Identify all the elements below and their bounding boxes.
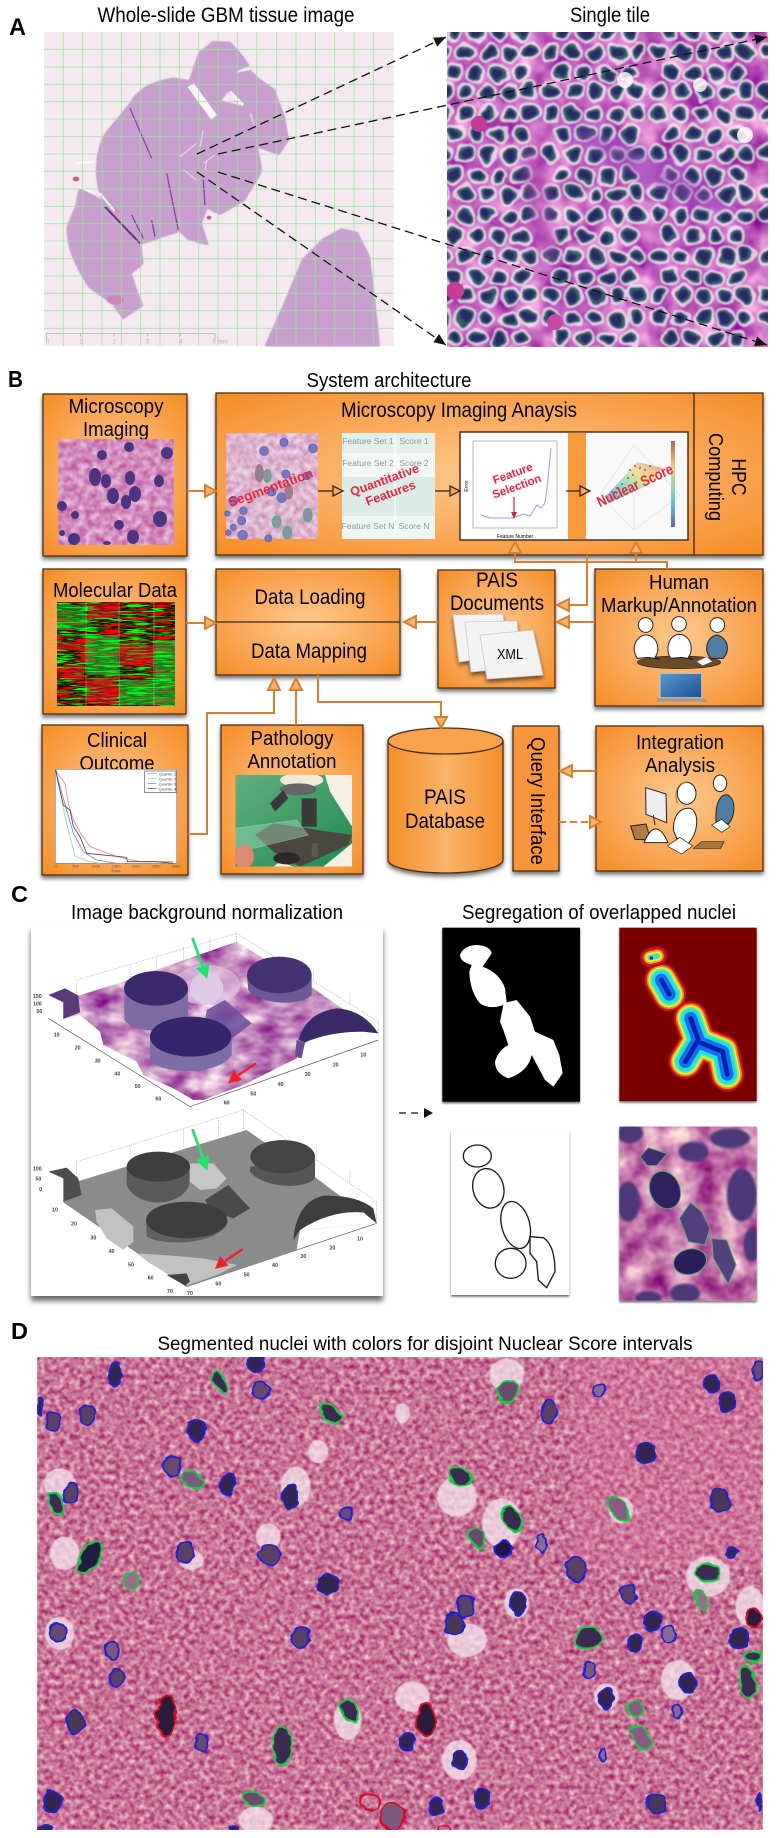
table: quantitative features: Score N [399,521,429,531]
box: Human Markup/Annotation: Human [649,571,709,594]
plot: grey surface: 60 [148,1276,154,1282]
plot: grey surface: 40 [109,1249,115,1255]
plot: colour surface: 100 [33,1001,42,1007]
arrow: pathology annotation to data mapping [290,678,302,725]
plot: colour surface: 10 [360,1052,366,1058]
scale bar: 4 [179,339,183,345]
title: segmented nuclei: Segmented nuclei with colors for disjoint Nuclear Score intervals [158,1333,693,1355]
chart: survival curves: 1000 [91,864,101,869]
panels: nuclei segregation steps [442,928,760,1304]
image: binary nuclei mask [442,928,580,1102]
dashed zoom arrows from slide to tile [197,37,767,345]
label: segmentation: Segmentation [226,465,315,510]
panel label D: D [11,1318,28,1344]
tissue: top lobe [191,43,247,120]
red outlined nuclei [156,1608,761,1834]
pink fragments [73,177,211,305]
box: Microscopy Imaging [43,394,187,556]
chart: survival curves: 3000 [172,864,181,869]
plot: colour surface: 40 [114,1071,120,1077]
title: segregation of nuclei: Segregation of overlapped nuclei [462,901,736,924]
divider and HPC computing section: Computing [704,433,727,521]
box: PAIS Documents: PAIS [476,569,518,592]
box: Human Markup/Annotation: Markup/Annotation [601,594,757,617]
chart: survival curves: 500 [72,864,80,869]
plot: colour surface: 150 [33,994,42,1000]
image: segmentation result [225,433,318,542]
box: Query Interface: Query Interface [526,737,549,865]
arrow: query interface to integration (dashed) [559,816,601,828]
plot: grey surface: 60 [215,1281,221,1287]
box: Data Loading and Data Mapping: Data Loading [254,585,366,609]
arrow: molecular data to data mapping [186,617,216,629]
heatmap [57,602,175,706]
divider and HPC computing section [694,393,750,555]
plot: grey surface: 50 [128,1262,134,1268]
scale bar: 3 [146,339,150,345]
title: background normalization: Image background normalization [71,901,343,924]
panel label B: B [8,366,23,392]
box: Data Loading and Data Mapping [216,569,400,675]
table: quantitative features: Score 2 [399,458,429,468]
image: distance-transform heat contours [619,928,757,1101]
box: Microscopy Imaging Analysis [216,393,763,555]
box: PAIS Documents [438,569,555,688]
panel: 3D surface plots [31,926,383,1297]
box: Pathology Annotation: Annotation [248,750,336,773]
box: Molecular Data [43,569,186,714]
single tile micrograph [447,32,768,347]
title: whole-slide image: Whole-slide GBM tissue image [98,4,354,27]
scale bar: 2 [113,339,117,345]
plot: grey surface: 40 [272,1263,278,1269]
chart: feature selection error curve: Feature Number [497,534,534,540]
chart: survival curves: 2000 [132,864,141,869]
box: Query Interface [513,726,559,871]
icon: XML document stack: XML [497,647,523,663]
label: quantitative features: Quantitative [348,461,421,499]
box: Pathology Annotation: Pathology [250,727,334,750]
arrow: integration to query interface [560,765,596,777]
box: Human Markup/Annotation [595,569,763,706]
panel label C: C [11,881,28,907]
image: nuclei outline contours [451,1131,569,1295]
chart: survival curves: 0 [55,864,58,869]
chart: feature selection error curve [464,441,557,540]
box: PAIS Documents: Documents [450,592,544,615]
legend: Quartile 2 [159,776,177,781]
image: microscope with glass slide [234,773,352,869]
arrow: PAIS documents to data loading [404,616,438,628]
plot: colour surface: 30 [95,1058,101,1064]
tissue: lower left lobe [68,190,142,317]
chart: feature selection error curve: Error [464,480,470,492]
scale bar [46,333,228,345]
scale bar: 5 mm [213,339,228,345]
icon: analysts at a computer [631,775,734,854]
plot: grey surface: 30 [90,1235,96,1241]
chart: nuclear score 3D scatter [586,433,687,539]
image: brain tissue micrograph [57,439,174,545]
whole-slide tissue image with tile grid [44,32,394,346]
table: quantitative features: Feature Set 2 [342,458,394,468]
chart: nuclear score 3D scatter: Nuclear Score [594,461,676,511]
plot: colour surface: 10 [54,1032,60,1038]
chart: feature selection error curve: Feature [491,461,535,487]
plot: grey surface: 10 [357,1236,363,1242]
plot: grey surface: 100 [33,1167,42,1173]
plot: colour surface: 20 [333,1062,339,1068]
table: quantitative features: Feature Set N [342,521,394,531]
plot: colour surface: 40 [278,1082,284,1088]
plot: grey surface: 70 [187,1291,193,1297]
box: Clinical Outcome: Clinical [87,729,147,752]
box: Integration Analysis: Integration [636,731,724,754]
arrow: normalization to segregation [399,1108,433,1118]
plot: colour surface: 60 [155,1096,161,1102]
box: Data Loading and Data Mapping: Data Mapping [251,639,367,663]
plot: colour surface: 50 [36,1009,42,1015]
legend: Quartile 4 [159,786,177,791]
plot: grey surface: 50 [244,1272,250,1278]
tissue tears and folds [77,85,243,243]
legend: Quartile 1 [159,771,177,776]
title: system architecture: System architecture [306,370,472,392]
box: Microscopy Imaging: Imaging [83,418,149,441]
cylinder: PAIS Database [388,728,503,873]
table: quantitative features [342,433,435,539]
image: segmented nuclei over tissue [37,1356,765,1834]
heading: Microscopy Imaging Anaysis [341,399,577,422]
box: Integration Analysis [596,726,763,871]
plot: colour surface: 20 [75,1045,81,1051]
chart: feature selection error curve: Selection [491,473,543,502]
chart: survival curves: 1500 [112,864,121,869]
connectors between architecture boxes [186,485,667,834]
plot: grey surface: 0 [39,1187,42,1193]
box: Clinical Outcome: Outcome [80,752,154,775]
label: quantitative features: Features [364,478,418,509]
plot: grey surface: 30 [300,1254,306,1260]
legend: Quartile 3 [159,781,177,786]
tissue: upper right lobe [229,72,287,153]
plot: grey surface: 70 [167,1289,173,1295]
divider and HPC computing section: HPC [727,458,750,496]
chart: survival curves: 2500 [152,864,161,869]
tissue: main body [98,79,261,243]
plot: colour surface [33,933,380,1107]
plot: colour surface: 60 [224,1101,230,1107]
framed charts [460,432,688,540]
legend [145,771,177,793]
scale bar: 0 [46,339,50,345]
tissue: lower right lobe [267,230,378,345]
black arrows inside analysis pipeline [318,486,590,496]
cylinder: PAIS Database: PAIS [424,786,466,809]
arrow: analysis to PAIS documents [557,555,587,611]
title: single tile: Single tile [570,4,650,27]
image: histology with nuclei outlines [617,1123,760,1304]
plot: colour surface: 50 [250,1091,256,1097]
plot: colour surface: 50 [135,1084,141,1090]
plot: grey surface: 50 [35,1177,41,1183]
table: quantitative features: Feature Set 1 [342,436,394,446]
scale bar: 1 [79,339,83,345]
box: Integration Analysis: Analysis [645,754,715,777]
box: Microscopy Imaging: Microscopy [68,395,164,418]
box: Molecular Data: Molecular Data [53,579,178,602]
green outlined nuclei [44,1370,762,1809]
cylinder: PAIS Database: Database [405,810,485,833]
plot: grey surface: 20 [71,1221,77,1227]
plot: grey surface: 10 [52,1207,58,1213]
icon: three people at a table with laptop [634,617,727,702]
chart: survival curves: Days [111,868,121,873]
vacuoles around nuclei [44,1358,765,1833]
plot: grey surface [33,1110,377,1297]
arrow: clinical outcome to data mapping [188,678,280,834]
arrow: imaging to analysis [187,485,216,497]
arrow: data mapping to database [318,675,447,728]
arrow: human markup to analysis charts [509,542,667,569]
blue outlined nuclei [37,1356,763,1833]
panel label A: A [9,14,26,41]
arrow: human markup to PAIS documents [557,616,595,628]
table: quantitative features: Score 1 [399,436,429,446]
plot: grey surface: 20 [329,1245,335,1251]
plot: colour surface: 30 [305,1072,311,1078]
box: Pathology Annotation [221,725,363,874]
chart: survival curves [55,769,181,873]
box: Clinical Outcome [42,725,188,875]
